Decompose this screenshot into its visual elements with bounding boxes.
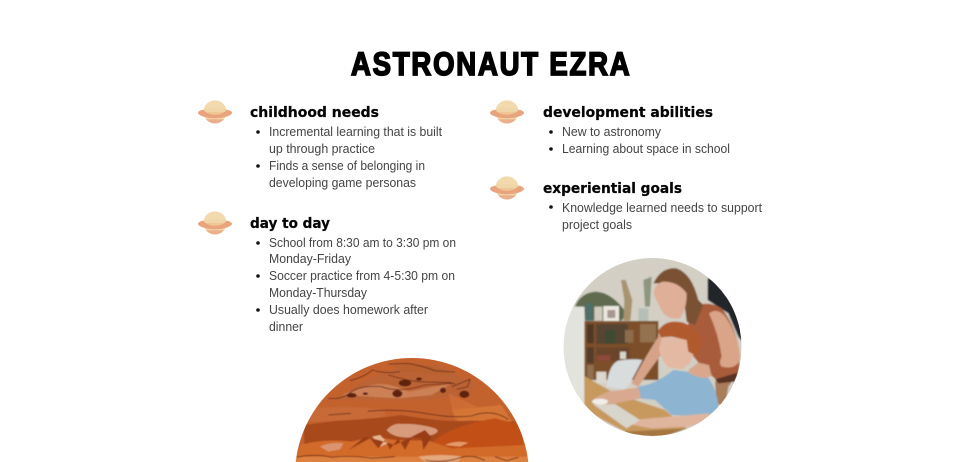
list: experiential goals (549, 201, 763, 232)
monitor (564, 306, 586, 404)
mother hand (688, 363, 712, 378)
panel: experiential goals (490, 176, 763, 232)
chair (607, 359, 642, 390)
keyboard (593, 404, 640, 428)
illustration: Jupiter planet (292, 357, 532, 462)
list: day to day: dinner (269, 320, 303, 334)
shelf (584, 321, 658, 380)
panel: childhood needs (198, 100, 443, 190)
list: day to day (256, 236, 456, 334)
list: childhood needs (256, 125, 443, 190)
list: experiential goals: Knowledge learned needs to support (562, 201, 763, 215)
heading: experiential goals: experiential goals (543, 181, 682, 197)
list: day to day: Usually does homework after (269, 303, 428, 317)
list: development abilities (549, 125, 730, 156)
icon: planet (490, 100, 524, 124)
upper cloud band (342, 368, 471, 399)
lower bands (298, 438, 528, 456)
list: experiential goals: project goals (562, 218, 632, 232)
list: development abilities: New to astronomy (562, 125, 662, 139)
boy hands and arms (593, 387, 641, 404)
list: development abilities: Learning about space in school (562, 142, 730, 156)
boy shirt (638, 370, 719, 417)
boy head (659, 337, 695, 369)
photo: mother and son at computer (564, 258, 742, 436)
heading: day to day: day to day (250, 216, 331, 232)
plants and shelf top (575, 292, 627, 321)
heading: development abilities: development abilities (543, 105, 713, 121)
pale clouds (387, 424, 438, 438)
list: day to day: School from 8:30 am to 3:30 pm on (269, 236, 456, 250)
list: childhood needs: Finds a sense of belonging in (269, 159, 425, 173)
list: day to day: Monday-Friday (269, 252, 352, 266)
title: ASTRONAUT EZRA (351, 47, 630, 83)
dark belt (304, 415, 516, 444)
mother arm and top (632, 334, 662, 387)
mother hair and face (653, 268, 703, 325)
list: day to day: Monday-Thursday (269, 286, 368, 300)
list: childhood needs: up through practice (269, 142, 375, 156)
heading: childhood needs: childhood needs (250, 105, 379, 121)
list: childhood needs: Incremental learning that is built (269, 125, 443, 139)
panel: day to day (198, 211, 456, 334)
desk (584, 376, 687, 437)
icon: planet (490, 176, 524, 200)
panel: development abilities (490, 100, 730, 156)
list: childhood needs: developing game personas (269, 176, 416, 190)
list: day to day: Soccer practice from 4-5:30 pm on (269, 269, 455, 283)
icon: planet (198, 100, 232, 124)
icon: planet (198, 211, 232, 235)
dark squiggle in belt (348, 430, 432, 450)
